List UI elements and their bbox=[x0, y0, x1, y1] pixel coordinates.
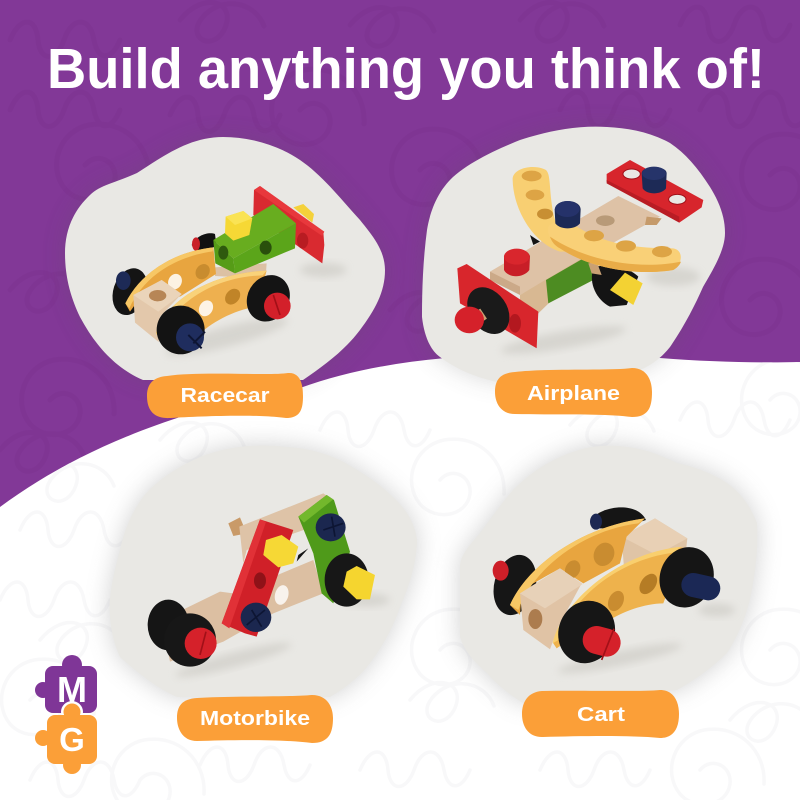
logo: MG puzzle pieces bbox=[35, 655, 97, 774]
panel: motorbike bbox=[110, 445, 417, 697]
label: Airplane: Airplane bbox=[527, 382, 620, 405]
label: Motorbike: Motorbike bbox=[200, 707, 310, 730]
motorbike backdrop shadow bbox=[110, 445, 417, 697]
cart toy bbox=[487, 507, 735, 679]
airplane backdrop blob bbox=[422, 127, 725, 382]
motorbike toy bbox=[148, 493, 390, 683]
racecar toy bbox=[107, 186, 347, 363]
racecar backdrop shadow bbox=[65, 137, 385, 380]
label: Racecar bbox=[147, 373, 303, 418]
cart backdrop shadow bbox=[460, 446, 757, 703]
airplane toy bbox=[455, 160, 703, 360]
logo piece: M: M bbox=[57, 669, 87, 710]
racecar backdrop blob bbox=[65, 137, 385, 380]
label: Cart bbox=[522, 690, 679, 738]
label: Racecar: Racecar bbox=[180, 384, 270, 407]
motorbike backdrop blob bbox=[110, 445, 417, 697]
purple background squiggle pattern bbox=[0, 2, 800, 471]
white wave area bbox=[0, 354, 800, 800]
panel: cart bbox=[460, 446, 757, 703]
airplane backdrop shadow bbox=[422, 127, 725, 382]
panel: racecar bbox=[65, 137, 385, 380]
label: Airplane bbox=[495, 368, 652, 417]
panel: airplane bbox=[422, 127, 725, 382]
cart backdrop blob bbox=[460, 446, 757, 703]
label: Cart: Cart bbox=[577, 703, 625, 726]
title: Build anything you think of! bbox=[47, 37, 765, 101]
white area squiggle pattern bbox=[58, 362, 798, 470]
logo piece: G: G bbox=[59, 721, 85, 758]
label: Motorbike bbox=[177, 695, 333, 743]
